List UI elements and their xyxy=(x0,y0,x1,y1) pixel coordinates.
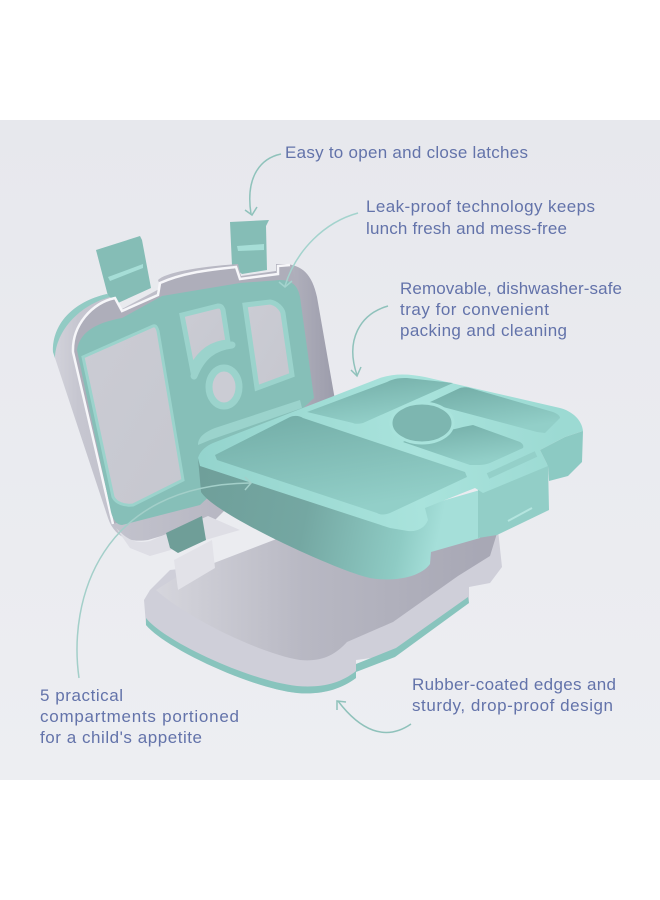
background panel xyxy=(0,120,660,780)
tray ear xyxy=(540,431,583,481)
label: compartments: 5 practical xyxy=(40,686,123,705)
lid white edge xyxy=(73,265,290,524)
label: compartments xyxy=(40,686,239,747)
label: leak-proof xyxy=(366,197,595,238)
compartment round xyxy=(391,403,453,443)
label: removable tray: tray for convenient xyxy=(400,300,549,319)
compartment top right xyxy=(428,387,560,433)
compartment top xyxy=(307,378,453,424)
tray rim xyxy=(198,374,583,531)
arrow: latches xyxy=(245,154,281,215)
label: compartments: for a child's appetite xyxy=(40,728,202,747)
compartment window circle xyxy=(209,368,239,406)
lid latch left xyxy=(96,236,151,303)
base floor xyxy=(156,530,498,660)
lid latch right xyxy=(230,220,269,274)
compartment lower right xyxy=(403,425,523,465)
lid teal rubber edge xyxy=(53,294,110,358)
arrow: leak-proof xyxy=(279,213,358,287)
label: rubber edges: sturdy, drop-proof design xyxy=(412,696,613,715)
label: rubber edges xyxy=(412,675,616,715)
label: rubber edges: Rubber-coated edges and xyxy=(412,675,616,694)
arrow: compartments xyxy=(77,477,251,678)
brand mark on tray xyxy=(488,454,536,476)
compartment large xyxy=(215,416,467,514)
label: removable tray: packing and cleaning xyxy=(400,321,567,340)
compartment window right xyxy=(245,302,292,388)
hinge xyxy=(116,516,240,556)
base xyxy=(144,530,502,693)
label: leak-proof: lunch fresh and mess-free xyxy=(366,219,567,238)
label: leak-proof: Leak-proof technology keeps xyxy=(366,197,595,216)
compartment window middle xyxy=(182,306,228,367)
lid inner wall xyxy=(73,266,300,524)
tray xyxy=(198,374,583,579)
product: open lunch box xyxy=(53,220,583,693)
label: compartments: compartments portioned xyxy=(40,707,239,726)
label: removable tray xyxy=(400,279,622,340)
lid xyxy=(53,264,335,541)
arrow: rubber edges xyxy=(337,701,411,732)
lid inner seal xyxy=(77,280,314,525)
tray right block wall xyxy=(478,464,549,538)
base corner post xyxy=(174,540,215,590)
label: removable tray: Removable, dishwasher-safe xyxy=(400,279,622,298)
arc ridge xyxy=(194,345,232,376)
tray side wall xyxy=(198,458,480,579)
label: latches: Easy to open and close latches xyxy=(285,143,528,162)
compartment window left xyxy=(83,326,183,505)
arrow: removable tray xyxy=(351,306,388,376)
